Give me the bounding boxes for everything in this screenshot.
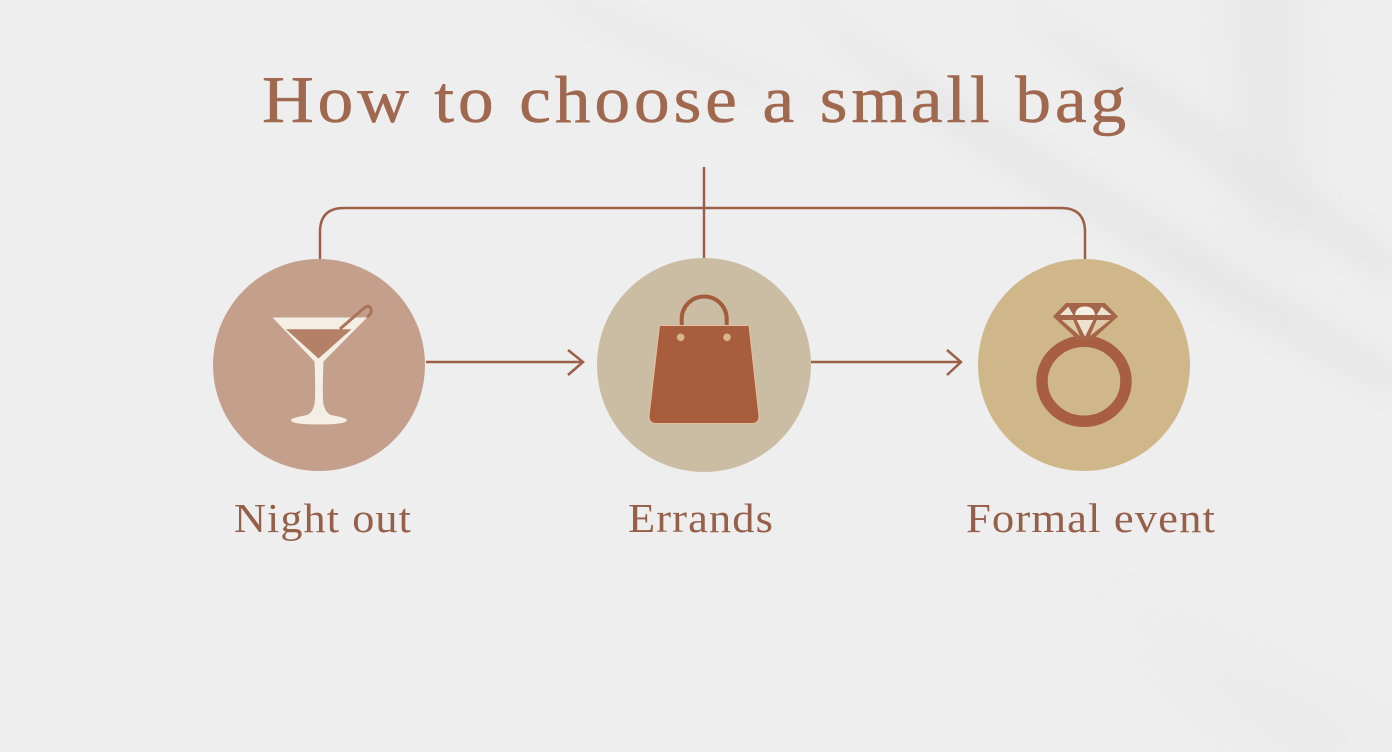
arrow: night out to errands (426, 350, 583, 375)
label: night out: Night out (234, 495, 412, 541)
icon: diamond ring (1042, 303, 1126, 421)
icon: handbag (649, 296, 759, 424)
label: errands: Errands (628, 495, 774, 541)
arrow: errands to formal event (811, 350, 961, 375)
panel: night out (213, 259, 425, 471)
connector: bracket linking the three occasions (320, 167, 1085, 259)
panel: errands (597, 258, 811, 472)
label: formal event: Formal event (966, 495, 1216, 541)
title: How to choose a small bag (262, 63, 1130, 137)
icon: cocktail glass (272, 306, 371, 424)
panel: formal event (978, 259, 1190, 471)
